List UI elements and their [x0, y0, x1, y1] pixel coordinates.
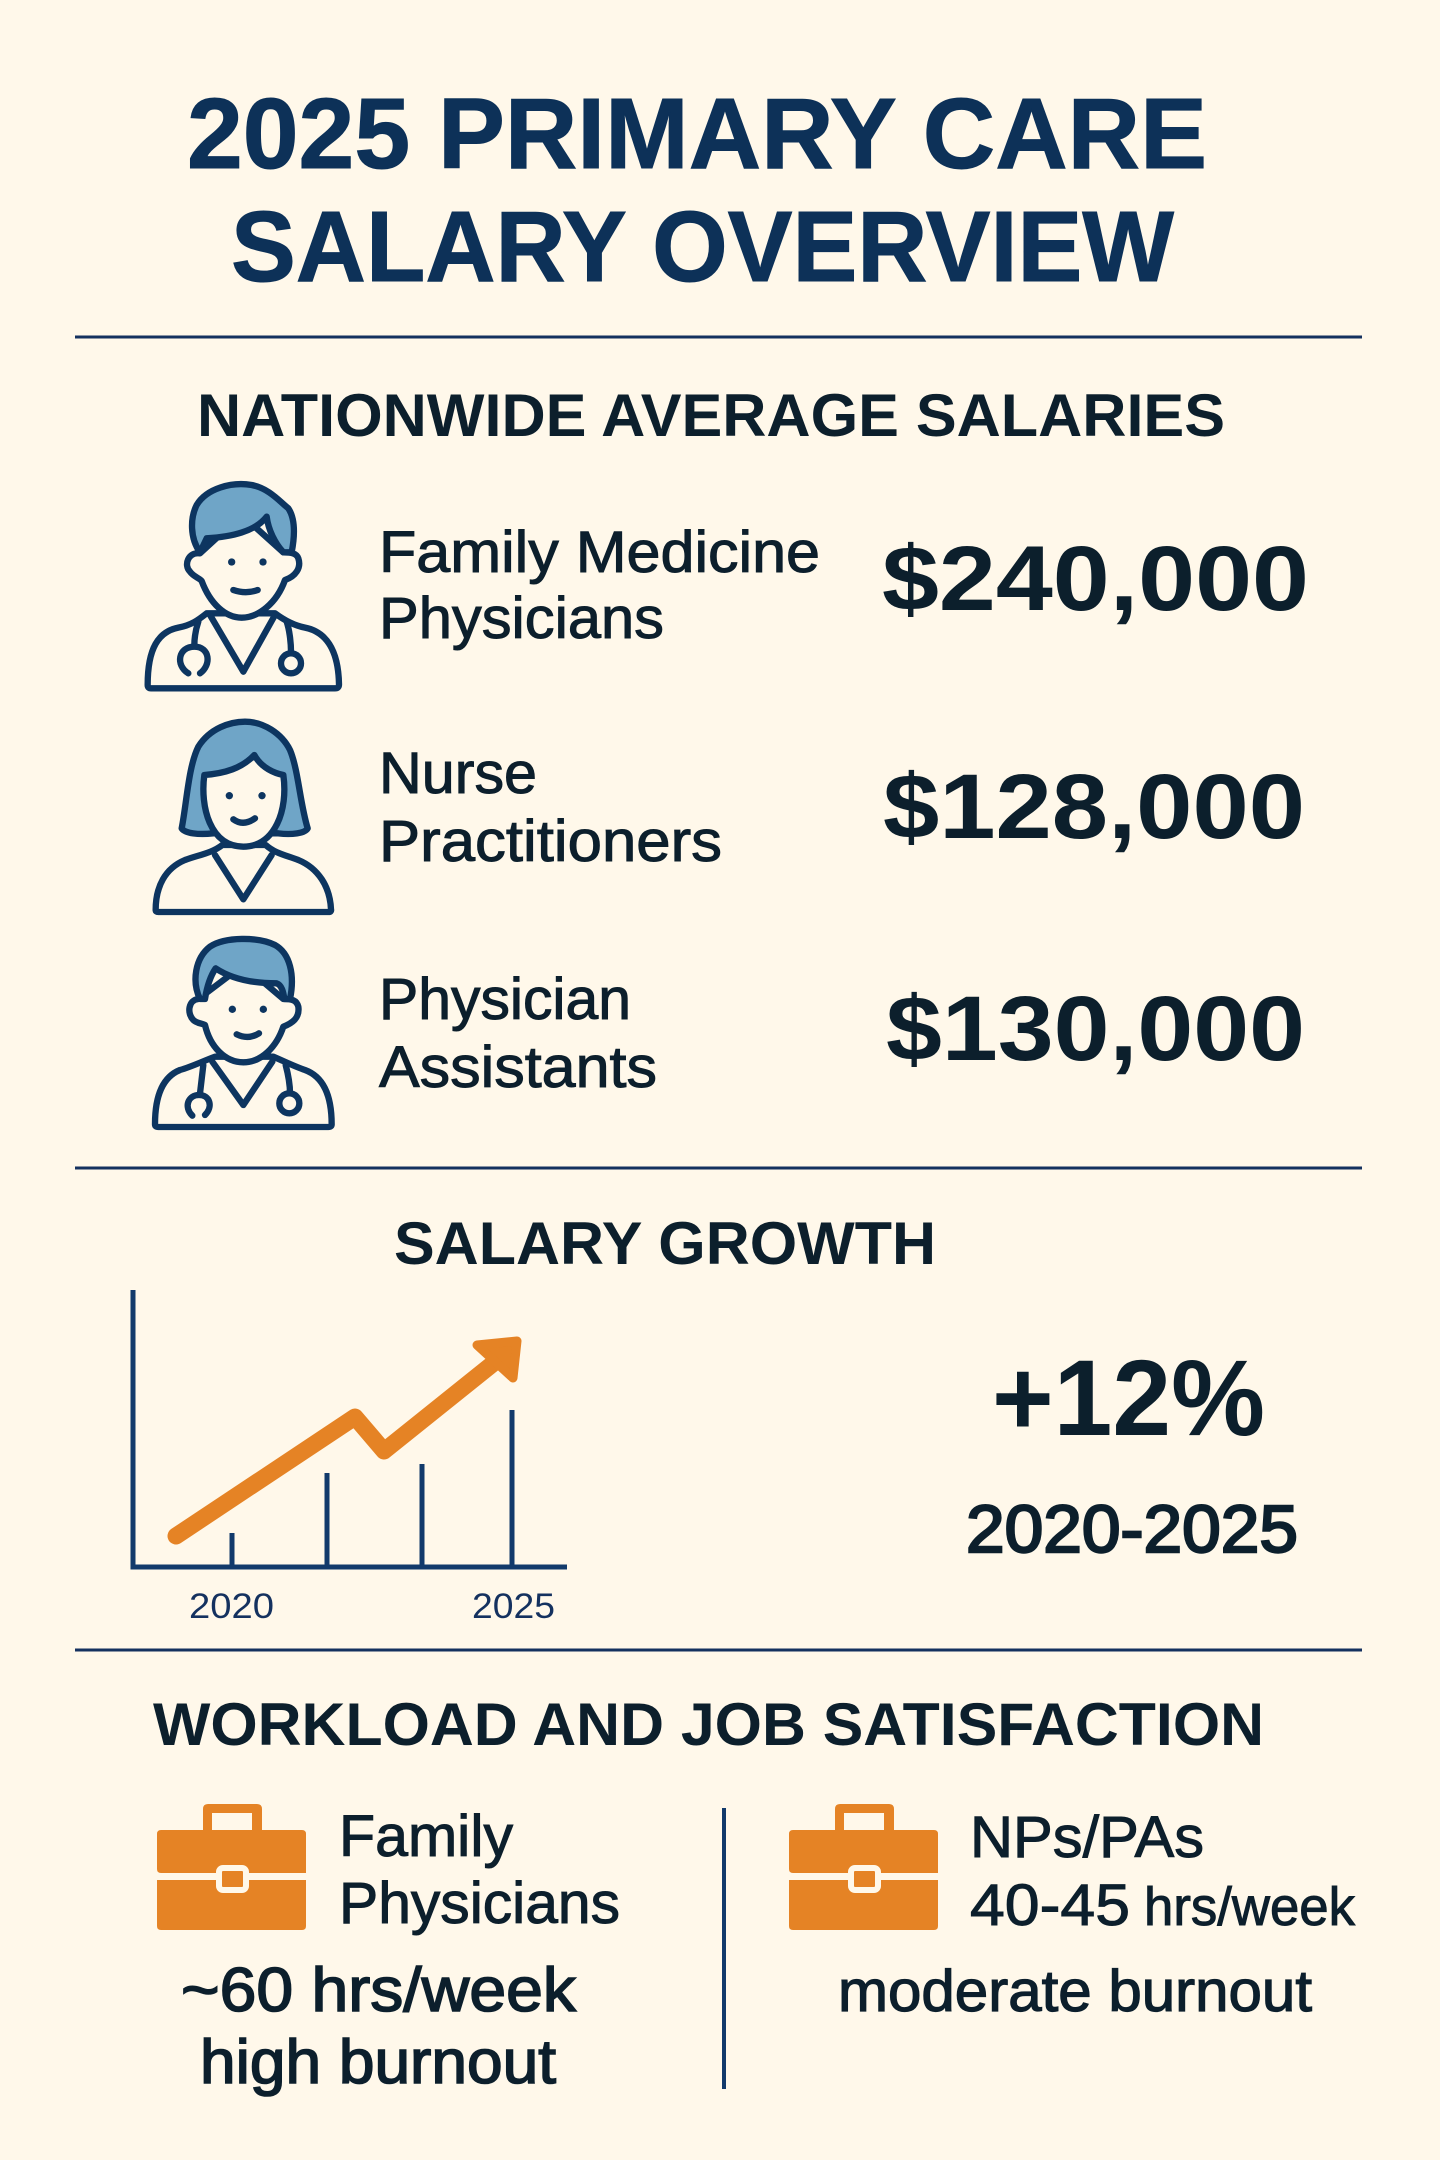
title: SALARY OVERVIEW: [231, 191, 1175, 303]
text: family physicians: Family: [339, 1804, 513, 1869]
text: family physicians: Physicians: [339, 1871, 620, 1936]
text: nps and pas: 40-45: [970, 1873, 1130, 1938]
label: nurse practitioners: Nurse: [379, 741, 537, 806]
text: family physician workload: high burnout: [200, 2028, 556, 2097]
label: family medicine physicians: Family Medicine: [379, 520, 820, 585]
icon: briefcase left: [157, 1804, 306, 1930]
panel: workload and job satisfaction: [153, 1691, 1356, 2097]
text: moderate burnout: moderate burnout: [838, 1959, 1312, 2024]
icon: nurse practitioner: [156, 722, 331, 912]
icon: physician assistant: [155, 939, 332, 1127]
text: family physician workload: [181, 1956, 577, 2097]
label: nurse practitioners: [379, 741, 722, 874]
heading: nationwide average salaries: NATIONWIDE AVERAGE SALARIES: [197, 382, 1225, 449]
panel: salary growth: [133, 1210, 1298, 1626]
label: family medicine physicians: Physicians: [379, 586, 664, 651]
title: 2025 PRIMARY CARE: [187, 78, 1207, 190]
panel: nationwide average salaries: [148, 382, 1309, 1127]
stat: plus 12 percent: +12%: [992, 1337, 1265, 1458]
heading: salary growth: SALARY GROWTH: [394, 1210, 936, 1277]
label: family medicine physicians: [379, 520, 820, 651]
label: physician assistants: Assistants: [379, 1035, 657, 1100]
stat: date range: 2020-2025: [966, 1492, 1298, 1567]
text: nps and pas: hrs/week: [1144, 1877, 1356, 1937]
text: family physicians: [339, 1804, 620, 1936]
salary: family medicine: $240,000: [882, 528, 1309, 630]
icon: family medicine physician: [148, 484, 339, 688]
salary: nurse practitioners: $128,000: [883, 756, 1305, 858]
text: nps and pas: [970, 1805, 1356, 1938]
icon: briefcase right: [789, 1804, 938, 1930]
chart: salary growth line: 2020: [189, 1587, 274, 1626]
label: nurse practitioners: Practitioners: [379, 809, 722, 874]
chart: salary growth line: 2025: [472, 1587, 555, 1626]
text: family physician workload: ~60 hrs/week: [181, 1956, 577, 2025]
salary: physician assistants: $130,000: [886, 978, 1305, 1080]
chart: salary growth line: [133, 1290, 567, 1626]
label: physician assistants: [379, 967, 657, 1100]
text: nps and pas: NPs/PAs: [970, 1805, 1204, 1870]
label: physician assistants: Physician: [379, 967, 631, 1032]
title: [187, 78, 1207, 303]
heading: workload and job satisfaction: WORKLOAD AND JOB SATISFACTION: [153, 1691, 1264, 1758]
